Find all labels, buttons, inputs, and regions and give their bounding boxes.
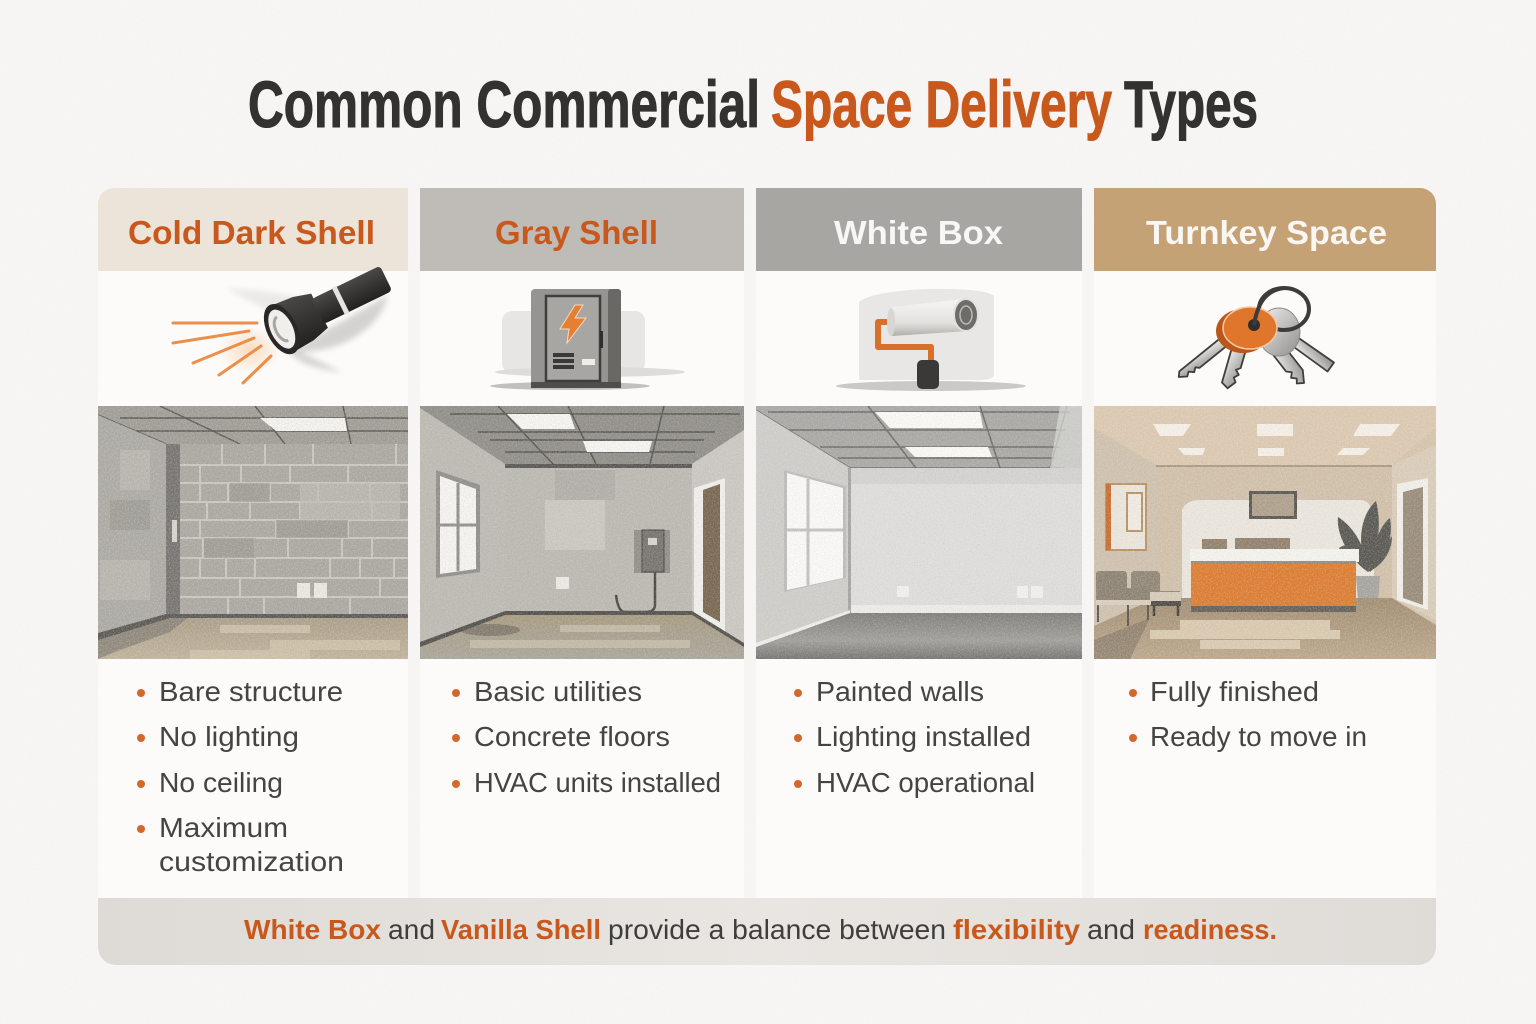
photo: gray shell room bbox=[420, 406, 744, 659]
bullet list: white box: HVAC operational bbox=[816, 767, 1035, 798]
icon: flashlight bbox=[173, 254, 398, 383]
photo: finished reception bbox=[1094, 406, 1436, 659]
footer callout: Vanilla Shell bbox=[441, 914, 601, 945]
bullet list: turnkey space: Ready to move in bbox=[1150, 721, 1367, 752]
footer callout: readiness. bbox=[1143, 914, 1277, 945]
footer callout bbox=[98, 898, 1436, 965]
bullet list: gray shell: Concrete floors bbox=[474, 721, 670, 752]
icon: paint roller bbox=[836, 289, 1026, 391]
bullet list: cold dark shell bbox=[137, 676, 344, 877]
footer callout: and bbox=[1087, 914, 1135, 945]
header: gray shell: Gray Shell bbox=[495, 214, 658, 251]
title: Space Delivery bbox=[771, 67, 1112, 141]
bullet list: white box bbox=[794, 676, 1035, 798]
header: gray shell bbox=[420, 188, 744, 271]
bullet list: gray shell bbox=[452, 676, 721, 798]
bullet list: turnkey space bbox=[1129, 676, 1367, 752]
title: Types bbox=[1124, 67, 1258, 141]
bullet list: cold dark shell: Maximum bbox=[159, 812, 288, 843]
footer callout: and bbox=[388, 914, 435, 945]
photo: white box room bbox=[756, 406, 1082, 659]
header: cold dark shell bbox=[98, 188, 408, 271]
bullet list: cold dark shell: customization bbox=[159, 846, 344, 877]
title bbox=[248, 67, 1258, 141]
bullet list: cold dark shell: Bare structure bbox=[159, 676, 343, 707]
panel: gray shell bbox=[420, 188, 744, 898]
bullet list: turnkey space: Fully finished bbox=[1150, 676, 1319, 707]
footer callout: White Box bbox=[244, 914, 381, 945]
bullet list: cold dark shell: No ceiling bbox=[159, 767, 283, 798]
armchairs bbox=[1096, 571, 1181, 626]
panel: cold dark shell bbox=[98, 188, 408, 898]
panel: turnkey space bbox=[1094, 188, 1436, 898]
bullet list: gray shell: Basic utilities bbox=[474, 676, 642, 707]
bullet list: white box: Painted walls bbox=[816, 676, 984, 707]
header: turnkey space: Turnkey Space bbox=[1146, 214, 1387, 251]
header: white box bbox=[756, 188, 1082, 271]
footer callout: flexibility bbox=[953, 914, 1080, 945]
icon: keys bbox=[1176, 288, 1334, 390]
header: turnkey space bbox=[1094, 188, 1436, 271]
bullet list: cold dark shell: No lighting bbox=[159, 721, 299, 752]
title: Common Commercial bbox=[248, 67, 760, 141]
header: cold dark shell: Cold Dark Shell bbox=[128, 214, 375, 251]
icon: electrical panel bbox=[490, 289, 685, 390]
bullet list: gray shell: HVAC units installed bbox=[474, 767, 721, 798]
header: white box: White Box bbox=[834, 214, 1004, 251]
photo: bare shell room bbox=[98, 406, 408, 659]
panel: white box bbox=[756, 188, 1082, 898]
footer callout: provide a balance between bbox=[608, 914, 946, 945]
bullet list: white box: Lighting installed bbox=[816, 721, 1031, 752]
